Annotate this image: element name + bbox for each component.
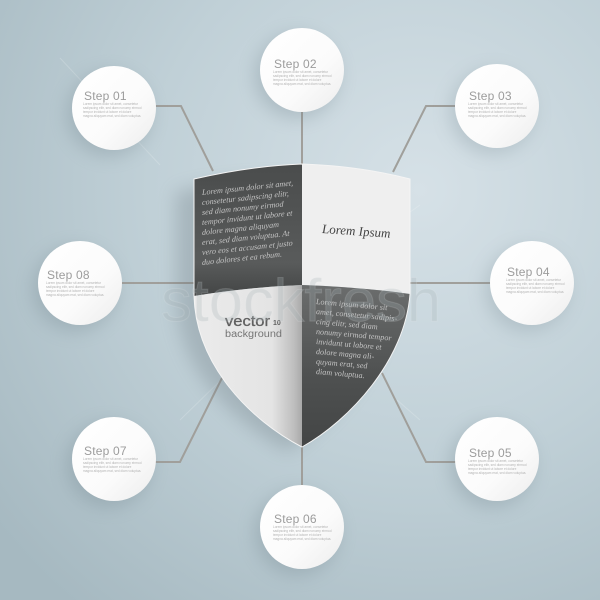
logo: vector background: background [225,329,282,340]
step 03: Step 03 [469,89,512,103]
step 02: Step 02 [274,57,317,71]
text: top left paragraph: tempor invidunt ut labore et [202,208,293,227]
text: bottom right paragraph: diam voluptua. [316,367,365,380]
step 01: tempor invidunt ut labore et dolore [83,110,132,114]
step 07: magna aliquyam erat, sed diam voluptua. [83,469,141,473]
step 03: tempor invidunt ut labore et dolore [468,110,517,114]
step 05: Step 05 [469,446,512,460]
step 08: tempor invidunt ut labore et dolore [46,289,95,293]
step 04 [485,241,574,331]
step 06 [255,485,344,575]
step 02: magna aliquyam erat, sed diam voluptua. [273,82,331,86]
step 07: tempor invidunt ut labore et dolore [83,465,132,469]
step 01: Step 01 [84,89,127,103]
text: top left paragraph: vero eos et accusam et justo [202,238,293,257]
step 02: tempor invidunt ut labore et dolore [273,78,322,82]
step 05: sadipscing elitr, sed diam nonumy eirmod [468,463,527,467]
step 01 [67,66,156,156]
text: top left paragraph: sed diam nonumy eirmod [202,199,284,217]
quadrant: bottom right dark [302,285,410,447]
text: bottom right paragraph: Lorem ipsum dolor sit [315,297,388,312]
quadrant: top left dark [194,164,302,296]
text: bottom right paragraph: quyam erat, sed [316,357,368,371]
step 05: Lorem ipsum dolor sit amet, consetetur [468,459,524,463]
step 04: tempor invidunt ut labore et dolore [506,286,555,290]
text: bottom right paragraph: dolore magna ali- [316,347,374,361]
step 05: tempor invidunt ut labore et dolore [468,467,517,471]
text: top left paragraph: duo dolores et ea rebum. [202,250,282,267]
step 01: magna aliquyam erat, sed diam voluptua. [83,114,141,118]
step 08 [33,241,122,331]
text: top left paragraph [201,178,293,267]
step 04: Lorem ipsum dolor sit amet, consetetur [506,278,562,282]
step 04: sadipscing elitr, sed diam nonumy eirmod [506,282,565,286]
step 02: Lorem ipsum dolor sit amet, consetetur [273,70,329,74]
text: top left paragraph: consetetur sadipscing elitr, [202,189,289,207]
logo: vector background [225,313,282,340]
step 06: magna aliquyam erat, sed diam voluptua. [273,537,331,541]
shield [194,164,410,447]
step 08: Step 08 [47,268,90,282]
step 03 [450,64,539,154]
step 07: sadipscing elitr, sed diam nonumy eirmod [83,461,142,465]
text: bottom right paragraph: amet, consetetur sadipis- [316,307,397,323]
text: top left paragraph: dolore magna aliquyam [202,220,279,237]
step 08: sadipscing elitr, sed diam nonumy eirmod [46,285,105,289]
step 07 [67,417,156,507]
step 05: magna aliquyam erat, sed diam voluptua. [468,471,526,475]
step 01: Lorem ipsum dolor sit amet, consetetur [83,102,139,106]
text: bottom right paragraph [315,297,397,383]
step 07: Lorem ipsum dolor sit amet, consetetur [83,457,139,461]
step 03: Lorem ipsum dolor sit amet, consetetur [468,102,524,106]
watermark: stockfresh [161,267,441,334]
text: bottom right paragraph: invidunt ut labore et [316,337,382,352]
text: top left paragraph: Lorem ipsum dolor sit amet, [201,178,293,197]
quadrant: bottom left light [194,285,302,447]
step 06: sadipscing elitr, sed diam nonumy eirmod [273,529,332,533]
step 07: Step 07 [84,444,127,458]
logo: vector background: vector [225,313,270,330]
text: Lorem Ipsum heading: Lorem Ipsum [321,221,390,241]
logo: vector background: 10 [273,320,281,327]
step 03: magna aliquyam erat, sed diam voluptua. [468,114,526,118]
step 04: magna aliquyam erat, sed diam voluptua. [506,290,564,294]
step 08: Lorem ipsum dolor sit amet, consetetur [46,281,102,285]
connector lines [118,106,492,488]
shield shadow [176,180,390,452]
shield outline [194,164,410,447]
text: bottom right paragraph: cing elitr, sed diam [316,317,378,331]
step 06: Step 06 [274,512,317,526]
step 06: tempor invidunt ut labore et dolore [273,533,322,537]
step 08: magna aliquyam erat, sed diam voluptua. [46,293,104,297]
step 01: sadipscing elitr, sed diam nonumy eirmod [83,106,142,110]
text: top left paragraph: erat, sed diam voluptua. At [202,229,290,247]
step 02 [255,28,344,118]
quadrant: top right light [302,164,410,294]
step 05 [450,417,539,507]
step 02: sadipscing elitr, sed diam nonumy eirmod [273,74,332,78]
step 06: Lorem ipsum dolor sit amet, consetetur [273,525,329,529]
text: bottom right paragraph: nonumy eirmod tempor [316,327,392,343]
step 03: sadipscing elitr, sed diam nonumy eirmod [468,106,527,110]
step 04: Step 04 [507,265,550,279]
